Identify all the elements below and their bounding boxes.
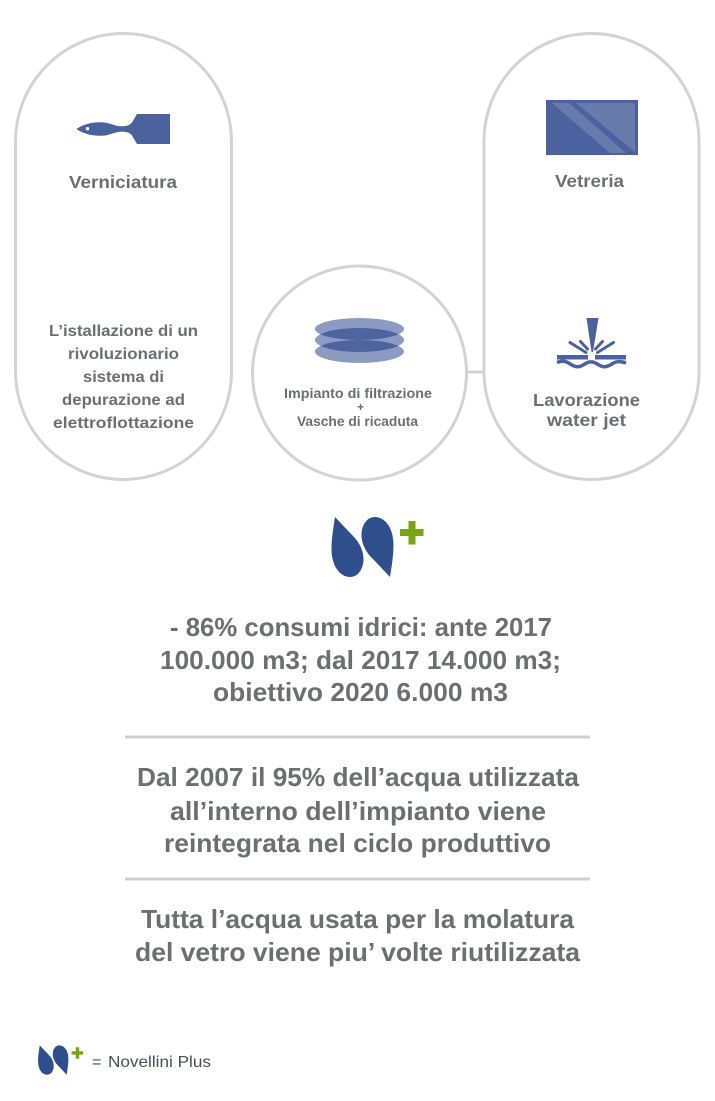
text block: lavorazione water jet [533,390,640,430]
text block: consumi idrici [160,612,561,707]
panel: vetreria [484,34,699,480]
text block: molatura: Tutta l’acqua usata per la molatura [141,904,575,934]
legend label: = [92,1054,101,1071]
connector line [466,370,484,374]
text block: molatura [135,904,581,967]
pill outline: right [484,34,699,480]
panel: verniciatura [16,34,232,480]
panel: impianto di filtrazione [252,266,466,480]
circle outline [252,266,466,480]
logo: novellini plus [332,517,424,577]
pill outline: left [16,34,232,480]
icon: filter discs [315,318,404,363]
text block: acqua reintegrata [137,762,580,858]
legend label: Novellini Plus [108,1054,211,1071]
text block: filtrazione: Vasche di ricaduta [297,414,418,429]
heading: verniciatura: Verniciatura [69,172,177,192]
text block: filtrazione: Impianto di filtrazione [284,386,433,401]
icon: paint brush fish [76,114,170,144]
heading: vetreria: Vetreria [555,171,624,191]
text block: depurazione: elettroflottazione [53,415,194,432]
text block: depurazione: rivoluzionario [68,346,179,363]
legend: novellini plus [38,1045,211,1075]
text block: depurazione [49,323,198,432]
text block: consumi idrici: 100.000 m3; dal 2017 14.000 m3; [160,645,561,675]
text block: filtrazione: + [357,400,364,414]
text block: consumi idrici: obiettivo 2020 6.000 m3 [213,677,508,707]
text block: acqua reintegrata: all’interno dell’impianto viene [170,796,546,826]
text block: depurazione: depurazione ad [62,392,185,409]
text block: acqua reintegrata: Dal 2007 il 95% dell’acqua utilizzata [137,762,580,792]
text block: molatura: del vetro viene piu’ volte riutilizzata [135,937,581,967]
icon: glass pane [546,100,638,155]
icon: small logo [38,1045,83,1075]
text block: filtrazione [284,386,433,429]
text block: lavorazione water jet: water jet [546,410,626,430]
text block: lavorazione water jet: Lavorazione [533,390,640,410]
icon: water jet [557,318,626,367]
text block: depurazione: sistema di [83,369,164,386]
text block: depurazione: L’istallazione di un [49,323,198,340]
text block: acqua reintegrata: reintegrata nel ciclo produttivo [164,828,551,858]
text block: consumi idrici: - 86% consumi idrici: ante 2017 [170,612,552,642]
